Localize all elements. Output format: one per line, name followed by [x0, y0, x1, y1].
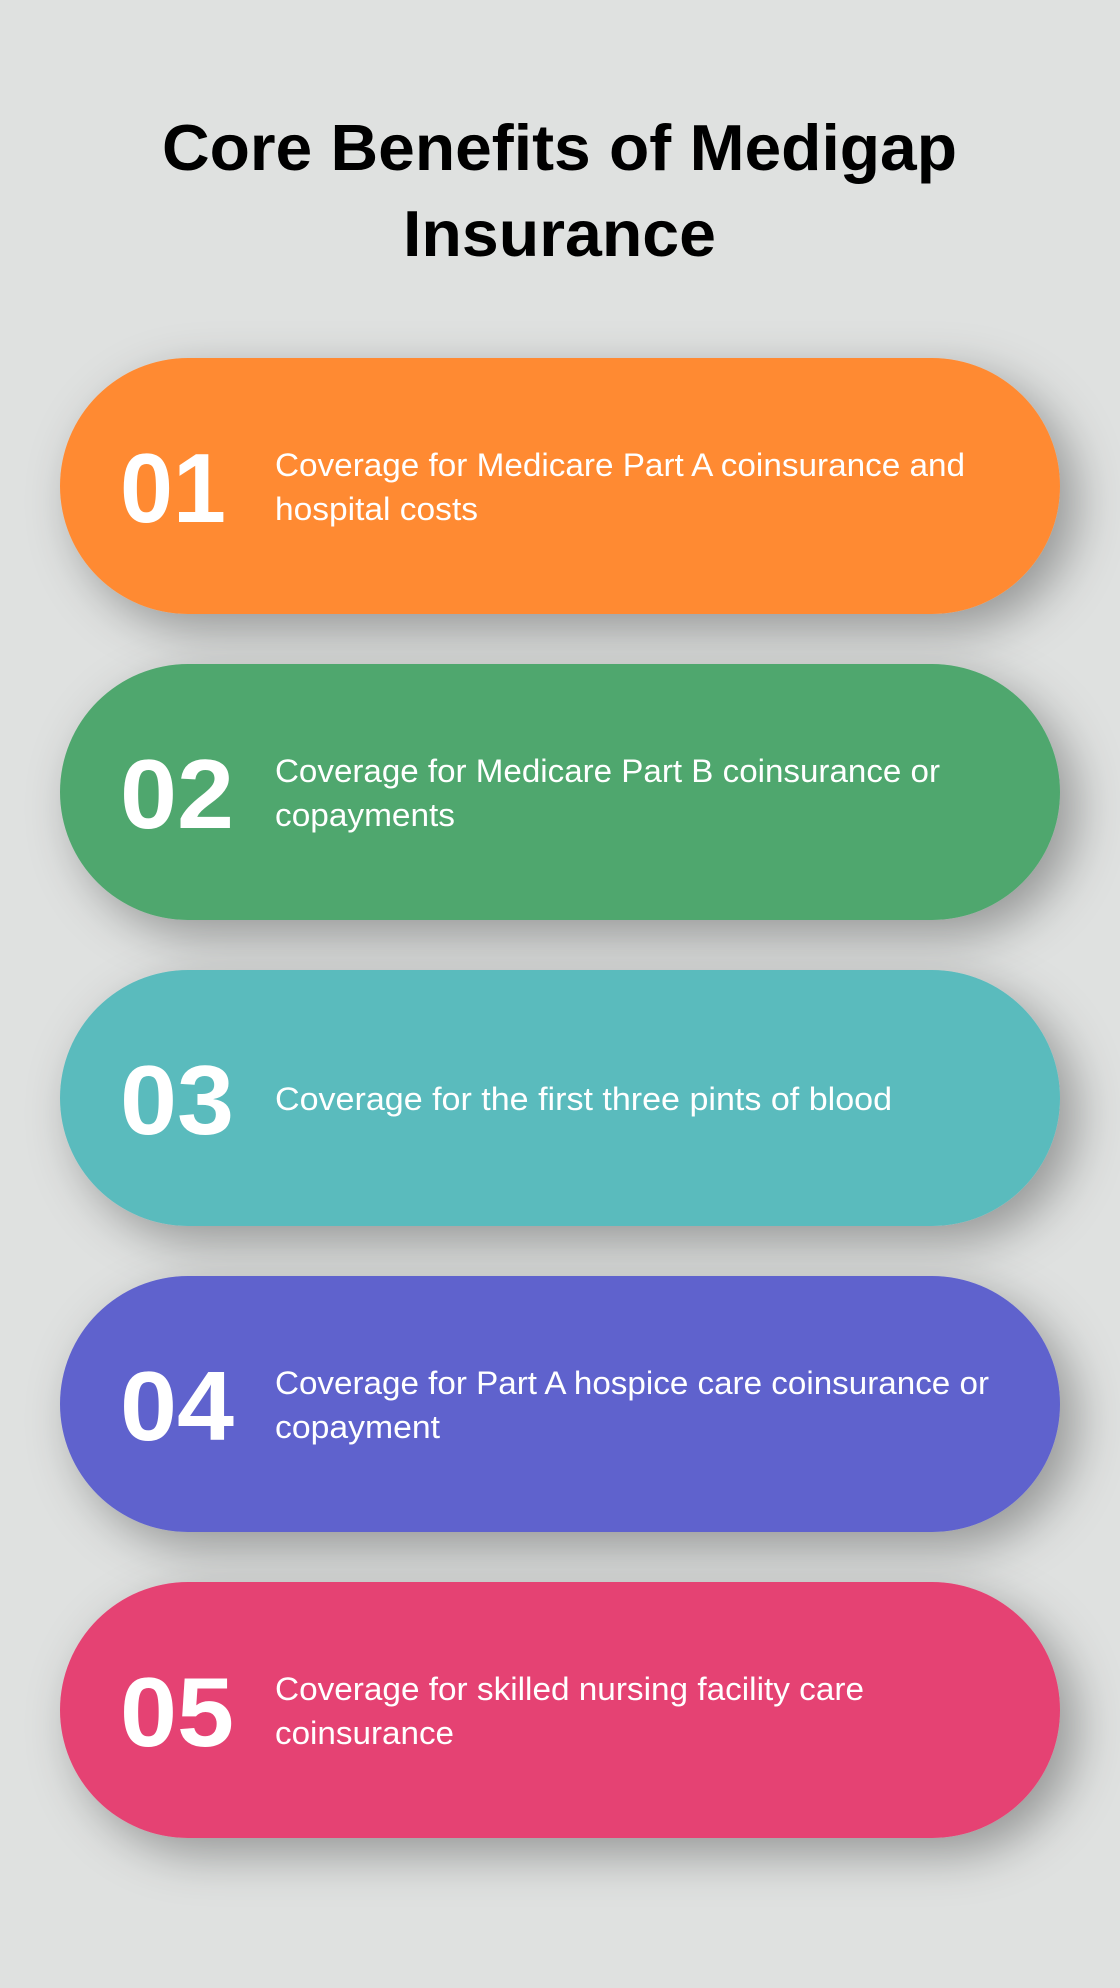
text: benefit 03: Coverage for the first three pints of blood: [275, 1081, 892, 1117]
pill: pink: [60, 1582, 1060, 1838]
title: [162, 111, 957, 270]
panel: benefit 02: [60, 664, 1060, 920]
panel: benefit 05: [60, 1582, 1060, 1838]
text: benefit 04: copayment: [275, 1409, 440, 1445]
panel: benefit 01: [60, 358, 1060, 614]
text: benefit 01: [275, 447, 965, 527]
number 02: 02: [120, 739, 234, 849]
number 01: 01: [120, 433, 226, 543]
text: benefit 05: [275, 1671, 864, 1751]
text: benefit 01: hospital costs: [275, 491, 478, 527]
number 04: 04: [120, 1351, 234, 1461]
panel: benefit 04: [60, 1276, 1060, 1532]
title: Insurance: [403, 197, 716, 270]
text: benefit 01: Coverage for Medicare Part A coinsurance and: [275, 447, 965, 483]
text: benefit 02: Coverage for Medicare Part B coinsurance or: [275, 753, 940, 789]
number 05: 05: [120, 1657, 234, 1767]
pill: purple: [60, 1276, 1060, 1532]
pill: orange: [60, 358, 1060, 614]
pill: teal: [60, 970, 1060, 1226]
panel: benefit 03: [60, 970, 1060, 1226]
text: benefit 05: coinsurance: [275, 1715, 454, 1751]
number 03: 03: [120, 1045, 234, 1155]
text: benefit 05: Coverage for skilled nursing facility care: [275, 1671, 864, 1707]
text: benefit 02: copayments: [275, 797, 455, 833]
text: benefit 04: Coverage for Part A hospice care coinsurance or: [275, 1365, 989, 1401]
title: Core Benefits of Medigap: [162, 111, 957, 184]
pill: green: [60, 664, 1060, 920]
text: benefit 02: [275, 753, 940, 833]
text: benefit 04: [275, 1365, 989, 1445]
